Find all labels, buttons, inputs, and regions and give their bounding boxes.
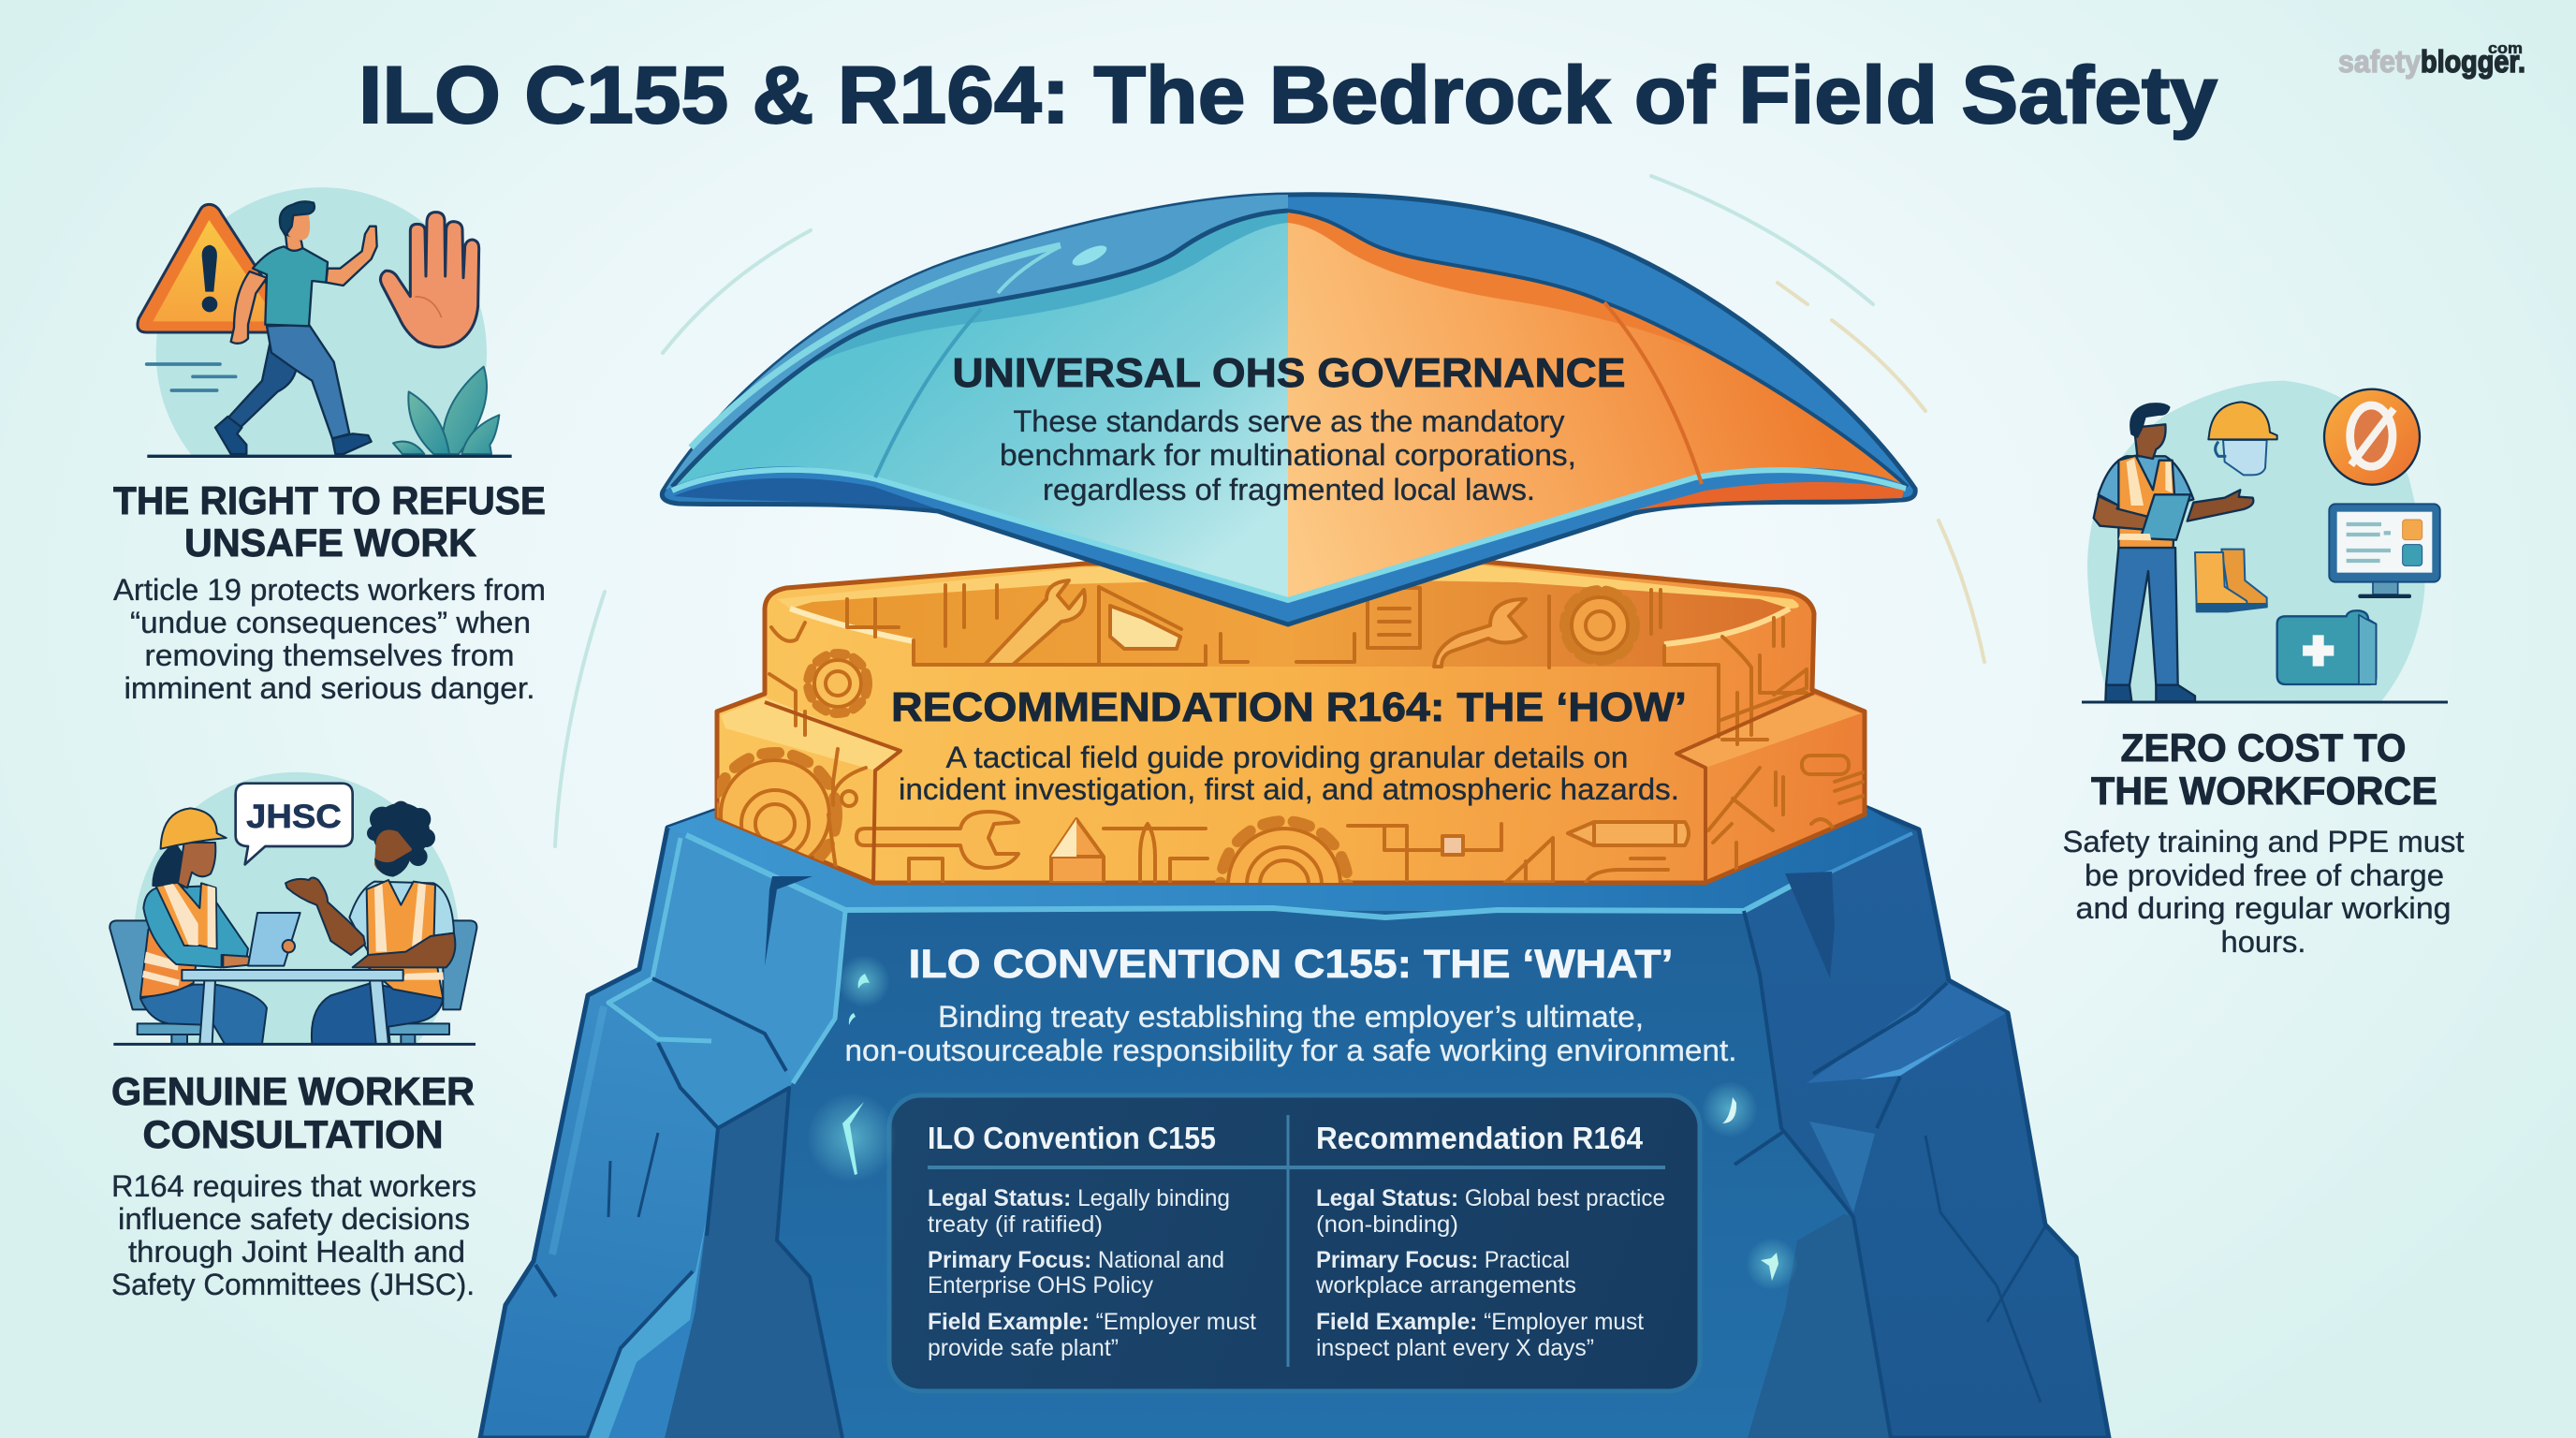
chairs [110, 920, 476, 1044]
left body 1 [113, 573, 546, 705]
rock pillar: ILO C155 [480, 807, 2109, 1438]
right body: and during regular working [2076, 891, 2451, 925]
rock light rim lines [552, 833, 1912, 1255]
column C155 [928, 1121, 1256, 1361]
warning triangle [138, 204, 294, 332]
dome band highlight [691, 245, 1061, 448]
frieze frame [914, 634, 1719, 737]
ring opening [790, 579, 1790, 667]
rock left facets [652, 842, 844, 1083]
rock right body [1498, 807, 2109, 1438]
left body 2: through Joint Health and [128, 1235, 465, 1269]
rock right lower pillar [1748, 1214, 1891, 1438]
left body 1: Article 19 protects workers from [113, 573, 546, 607]
left body 2 [111, 1169, 476, 1301]
column C155: provide safe plant” [928, 1335, 1119, 1361]
column C155: Enterprise OHS Policy [928, 1272, 1153, 1299]
dome text: These standards serve as the mandatory [1013, 404, 1565, 438]
left heading 2: GENUINE WORKER [111, 1069, 475, 1113]
logo: safetyblogger.com [2338, 39, 2525, 79]
left heading 2: CONSULTATION [142, 1112, 444, 1156]
R164 text: A tactical field guide providing granular details on [945, 741, 1629, 774]
engraved tools pattern [717, 579, 1865, 883]
zero cost coin [2324, 389, 2420, 485]
left heading 1 [113, 478, 546, 565]
ground [113, 1040, 476, 1049]
right body [2063, 825, 2465, 959]
dome orange upper shade [1288, 211, 1734, 364]
right facet tools [1708, 768, 1783, 843]
upper wrench [985, 580, 1085, 665]
right body: Safety training and PPE must [2063, 825, 2465, 858]
dome teal upper shade [805, 211, 1288, 367]
orange block [717, 562, 1865, 883]
map tile [1099, 587, 1206, 665]
C155 text: non-outsourceable responsibility for a safe working environment. [844, 1034, 1737, 1067]
logo: safetyblogger.com: blogger. [2421, 44, 2525, 79]
dome highlight oval [1070, 242, 1109, 270]
rock cracks [535, 911, 2045, 1438]
ring front rims [790, 609, 914, 641]
orange facet edges [765, 693, 1814, 883]
dome orange face [1288, 211, 1908, 600]
leaves [393, 367, 499, 454]
column C155: Legal Status: Legally binding [928, 1185, 1230, 1211]
worker [2094, 404, 2253, 701]
boots [2195, 550, 2267, 611]
dome underside right [1634, 482, 1904, 510]
first aid kit [2277, 610, 2376, 684]
ring side lines [769, 623, 805, 735]
ring back rim [777, 565, 1799, 609]
column C155: Primary Focus: National and [928, 1247, 1224, 1273]
rock left dark column [665, 1088, 842, 1438]
right body: hours. [2220, 925, 2306, 959]
icon: worker refusing unsafe work [138, 187, 512, 456]
comparison table [889, 1095, 1700, 1391]
rock front face [665, 910, 1891, 1438]
orange tier: R164 [715, 560, 1866, 886]
column C155: Field Example: “Employer must [928, 1309, 1256, 1335]
column R164: workplace arrangements [1315, 1272, 1576, 1299]
ground [147, 451, 512, 461]
dome teal face [672, 211, 1288, 600]
dome shell [662, 195, 1915, 624]
backdrop blob [2087, 381, 2424, 702]
R164 text: RECOMMENDATION R164: THE ‘HOW’ [891, 684, 1687, 730]
column R164: Primary Focus: Practical [1316, 1247, 1570, 1273]
column C155: treaty (if ratified) [928, 1211, 1103, 1238]
dome: universal OHS governance [662, 195, 1915, 624]
left facet connector [828, 749, 866, 883]
rock right wedge [1807, 983, 2006, 1083]
C155 text [844, 942, 1737, 1067]
right body: be provided free of charge [2085, 858, 2444, 892]
upper wrench two [1434, 599, 1526, 667]
rock top crack [765, 876, 812, 966]
document [1368, 588, 1420, 648]
left heading 1: UNSAFE WORK [184, 521, 476, 565]
backdrop circle [156, 187, 487, 456]
person [215, 201, 377, 454]
motion lines [147, 364, 236, 390]
left body 1: “undue consequences” when [130, 606, 531, 639]
left body 2: R164 requires that workers [111, 1169, 476, 1203]
table dividers [928, 1166, 1665, 1169]
C155 text: ILO CONVENTION C155: THE ‘WHAT’ [908, 942, 1674, 987]
bottom wrench [856, 812, 1018, 868]
dome lines [672, 211, 1908, 600]
woman worker [140, 808, 300, 1044]
R164 text: incident investigation, first aid, and atmospheric hazards. [899, 772, 1679, 806]
left body 2: Safety Committees (JHSC). [111, 1268, 475, 1301]
logo: safetyblogger.com: com [2488, 39, 2523, 57]
right heading: THE WORKFORCE [2091, 769, 2437, 813]
column R164: Field Example: “Employer must [1316, 1309, 1644, 1335]
dome underside left [674, 478, 938, 509]
ground [2082, 697, 2448, 706]
right heading: ZERO COST TO [2121, 726, 2406, 770]
icon: free PPE and training [2082, 381, 2448, 702]
table [182, 970, 403, 1044]
C155 text: Binding treaty establishing the employer’s ultimate, [938, 1000, 1644, 1034]
dome text: benchmark for multinational corporations, [1000, 438, 1576, 472]
rock left body [480, 811, 1123, 1438]
logo: safetyblogger.com: safety [2338, 44, 2422, 79]
left body 1: removing themselves from [144, 638, 515, 672]
icon: worker consultation JHSC: JHSC [246, 799, 342, 835]
rock top rim [667, 807, 1912, 911]
left body 1: imminent and serious danger. [124, 671, 535, 705]
column C155: ILO Convention C155 [928, 1121, 1216, 1155]
dome text [953, 350, 1625, 506]
bottom right tools [1348, 824, 1501, 880]
icon: worker consultation JHSC [110, 772, 476, 1044]
column R164: Recommendation R164 [1316, 1121, 1644, 1155]
left body 2: influence safety decisions [118, 1202, 470, 1236]
lower block top facets [721, 697, 900, 770]
glowing crystal cracks [807, 955, 1798, 1290]
backdrop circle [134, 772, 459, 1044]
decorative arcs [555, 176, 1984, 846]
column R164: inspect plant every X days” [1316, 1335, 1594, 1361]
right heading [2091, 726, 2437, 813]
left heading 1: THE RIGHT TO REFUSE [113, 478, 546, 522]
helmet with visor [2208, 402, 2277, 475]
speech bubble [236, 784, 353, 864]
title: ILO C155 & R164: The Bedrock of Field Safety [359, 51, 2217, 140]
monitor [2329, 504, 2440, 582]
man worker [285, 877, 455, 1044]
dome left band [666, 195, 1288, 490]
dome text: UNIVERSAL OHS GOVERNANCE [953, 350, 1625, 396]
table panel [889, 1095, 1700, 1391]
rock left lower pillar [587, 1310, 695, 1438]
column R164: (non-binding) [1316, 1211, 1458, 1238]
gears [1565, 591, 1634, 660]
raised hand [380, 213, 479, 347]
dome text: regardless of fragmented local laws. [1043, 473, 1535, 506]
bottom pencil tools [1051, 819, 1104, 883]
left heading 2 [111, 1069, 475, 1156]
R164 text [891, 684, 1687, 806]
column R164: Legal Status: Global best practice [1316, 1185, 1665, 1211]
column R164 [1315, 1121, 1665, 1361]
